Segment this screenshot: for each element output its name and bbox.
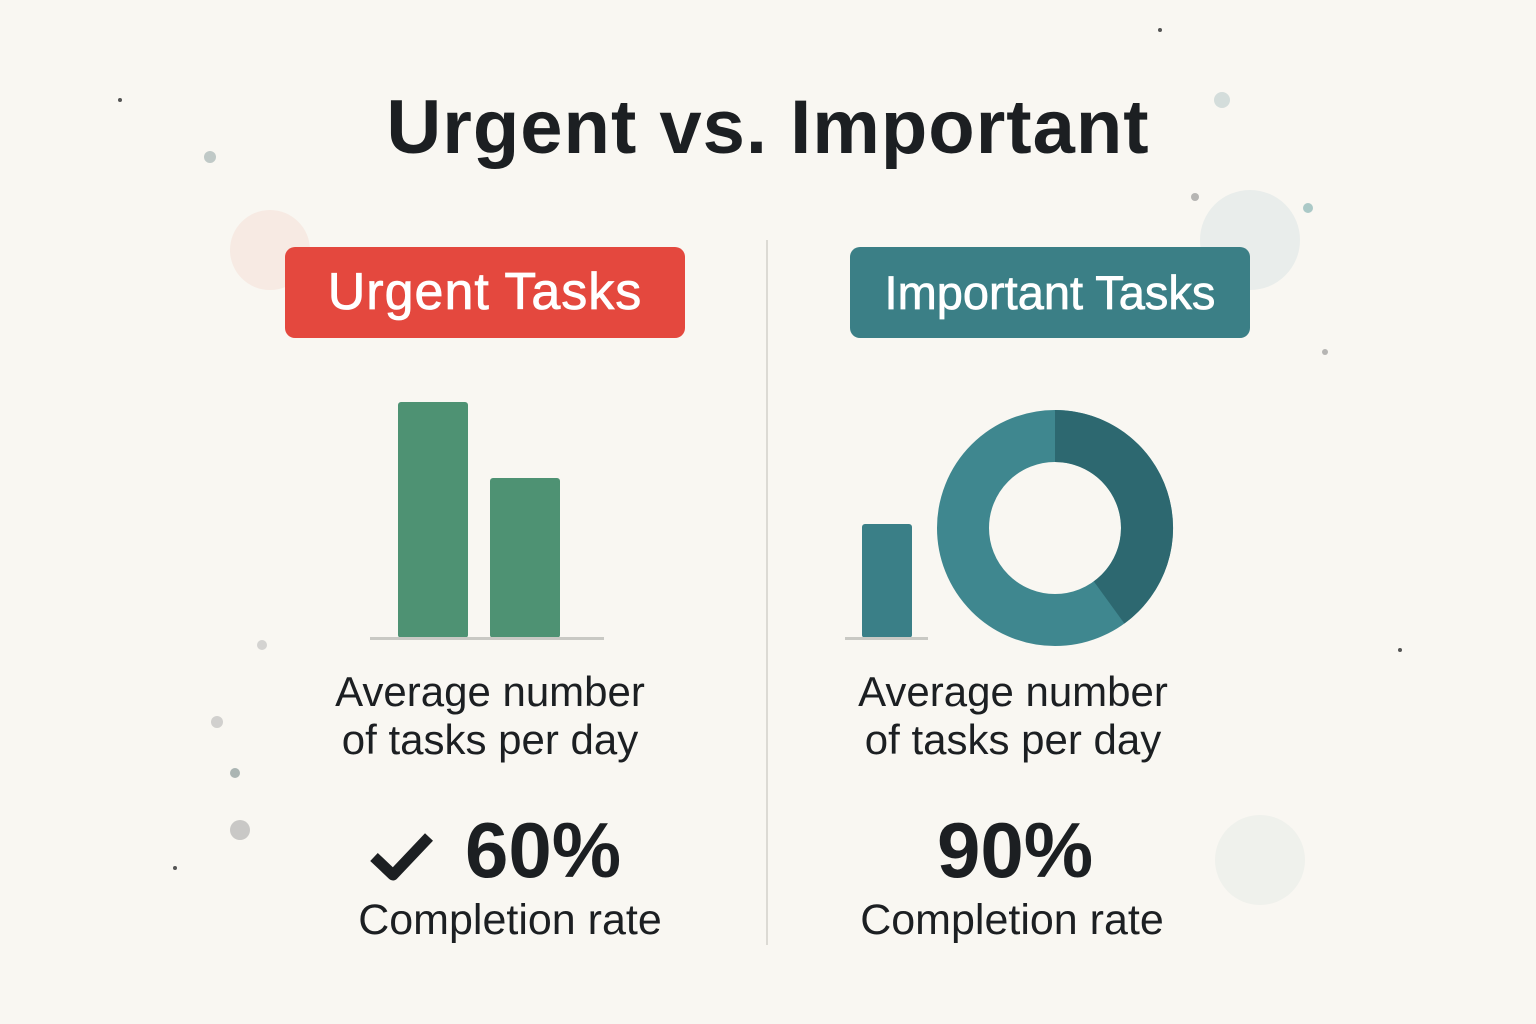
stat: 60% [370,806,621,894]
text: average number: Average number [335,668,645,715]
heading badge: Urgent Tasks [285,247,685,338]
heading badge: Important Tasks: Important Tasks [885,266,1215,319]
text: average number [858,668,1168,763]
bar chart [370,402,604,640]
text: average number: Average number [858,668,1168,715]
panel: important tasks [845,247,1250,944]
text: completion rate: Completion rate [860,896,1164,944]
divider [766,240,768,945]
panel: urgent tasks [285,247,685,944]
chart: bar and donut [845,410,1174,646]
stat: 60%: 60% [465,806,621,894]
text: completion rate: Completion rate [358,896,662,944]
heading badge: Important Tasks [850,247,1250,338]
icon: check [370,833,433,880]
heading badge: Urgent Tasks: Urgent Tasks [328,263,642,321]
text: average number: of tasks per day [342,716,638,763]
stat: 90%: 90% [937,806,1093,894]
text: average number [335,668,645,763]
text: average number: of tasks per day [865,716,1161,763]
title: Urgent vs. Important [386,85,1150,170]
